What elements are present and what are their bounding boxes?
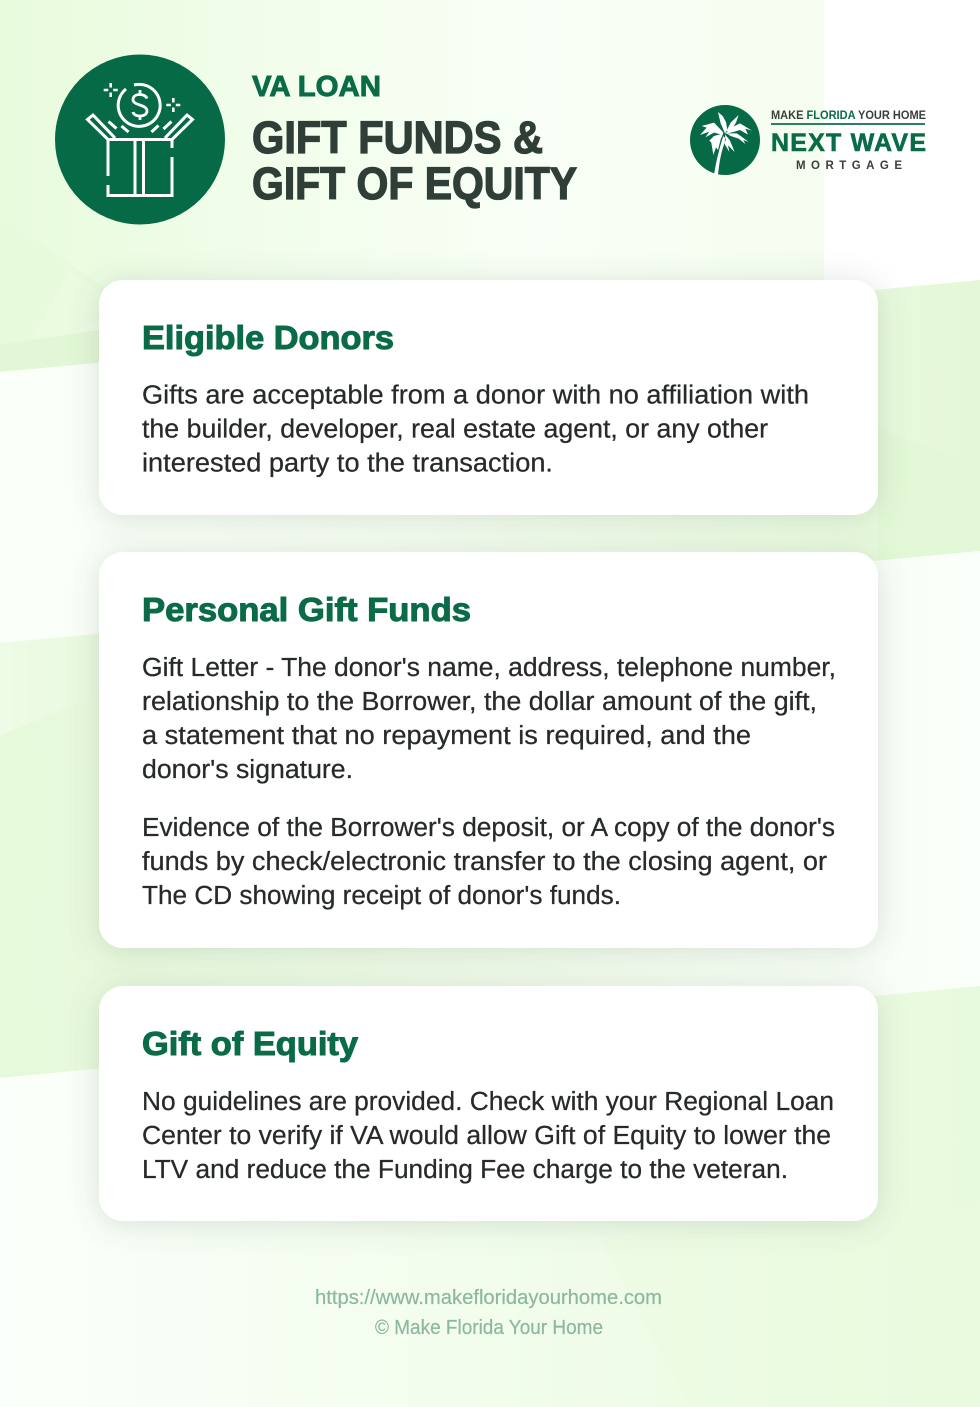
text: eligible donors body — [142, 382, 809, 478]
title — [252, 71, 577, 209]
title: VA LOAN — [252, 71, 381, 103]
title: GIFT FUNDS & — [252, 112, 543, 163]
text: eligible donors body: Gifts are acceptable from a donor with no affiliation with — [142, 382, 809, 410]
coin ring — [118, 84, 160, 126]
text: evidence of deposit: Evidence of the Borrower's deposit, or A copy of the donor's — [142, 814, 835, 842]
text: gift letter: donor's signature. — [142, 756, 353, 784]
text: gift letter: relationship to the Borrower, the dollar amount of the gift, — [142, 688, 817, 716]
text: evidence of deposit: funds by check/electronic transfer to the closing agent, or — [142, 848, 828, 876]
box body — [108, 140, 172, 196]
text: gift letter — [142, 654, 836, 784]
text: evidence of deposit — [142, 814, 835, 910]
text: eligible donors body: interested party to the transaction. — [142, 450, 553, 478]
text: gift letter: Gift Letter - The donor's name, address, telephone number, — [142, 654, 836, 682]
text: evidence of deposit: The CD showing receipt of donor's funds. — [142, 882, 621, 910]
footer: https://www.makefloridayourhome.com — [315, 1287, 662, 1309]
text: gift of equity body: LTV and reduce the Funding Fee charge to the veteran. — [142, 1156, 788, 1184]
box flaps — [88, 115, 192, 140]
icon: palm tree — [700, 112, 752, 175]
heading: eligible donors: Eligible Donors — [142, 319, 394, 356]
text: gift letter: a statement that no repayment is required, and the — [142, 722, 751, 750]
text: gift of equity body: No guidelines are provided. Check with your Regional Loan — [142, 1088, 834, 1116]
text: gift of equity body: Center to verify if VA would allow Gift of Equity to lower the — [142, 1122, 831, 1150]
heading: personal gift funds: Personal Gift Funds — [142, 591, 471, 628]
text: gift of equity body — [142, 1088, 834, 1184]
logo: Next Wave Mortgage: MAKE FLORIDA YOUR HOME — [771, 108, 926, 122]
logo: Next Wave Mortgage: MORTGAGE — [796, 160, 902, 172]
logo: Next Wave Mortgage: NEXT WAVE — [771, 129, 926, 157]
panel: personal gift funds — [99, 552, 878, 948]
icon: gift box with dollar coin — [55, 54, 225, 224]
logo: Next Wave Mortgage — [690, 105, 926, 175]
panel: eligible donors — [99, 280, 878, 515]
rays — [108, 122, 172, 132]
footer — [315, 1287, 662, 1339]
dollar sign — [133, 90, 147, 120]
sparkles — [104, 83, 180, 112]
title: GIFT OF EQUITY — [252, 158, 577, 209]
text: eligible donors body: the builder, developer, real estate agent, or any other — [142, 416, 769, 444]
heading: gift of equity: Gift of Equity — [142, 1025, 359, 1062]
footer: © Make Florida Your Home — [375, 1317, 603, 1339]
panel: gift of equity — [99, 986, 878, 1221]
